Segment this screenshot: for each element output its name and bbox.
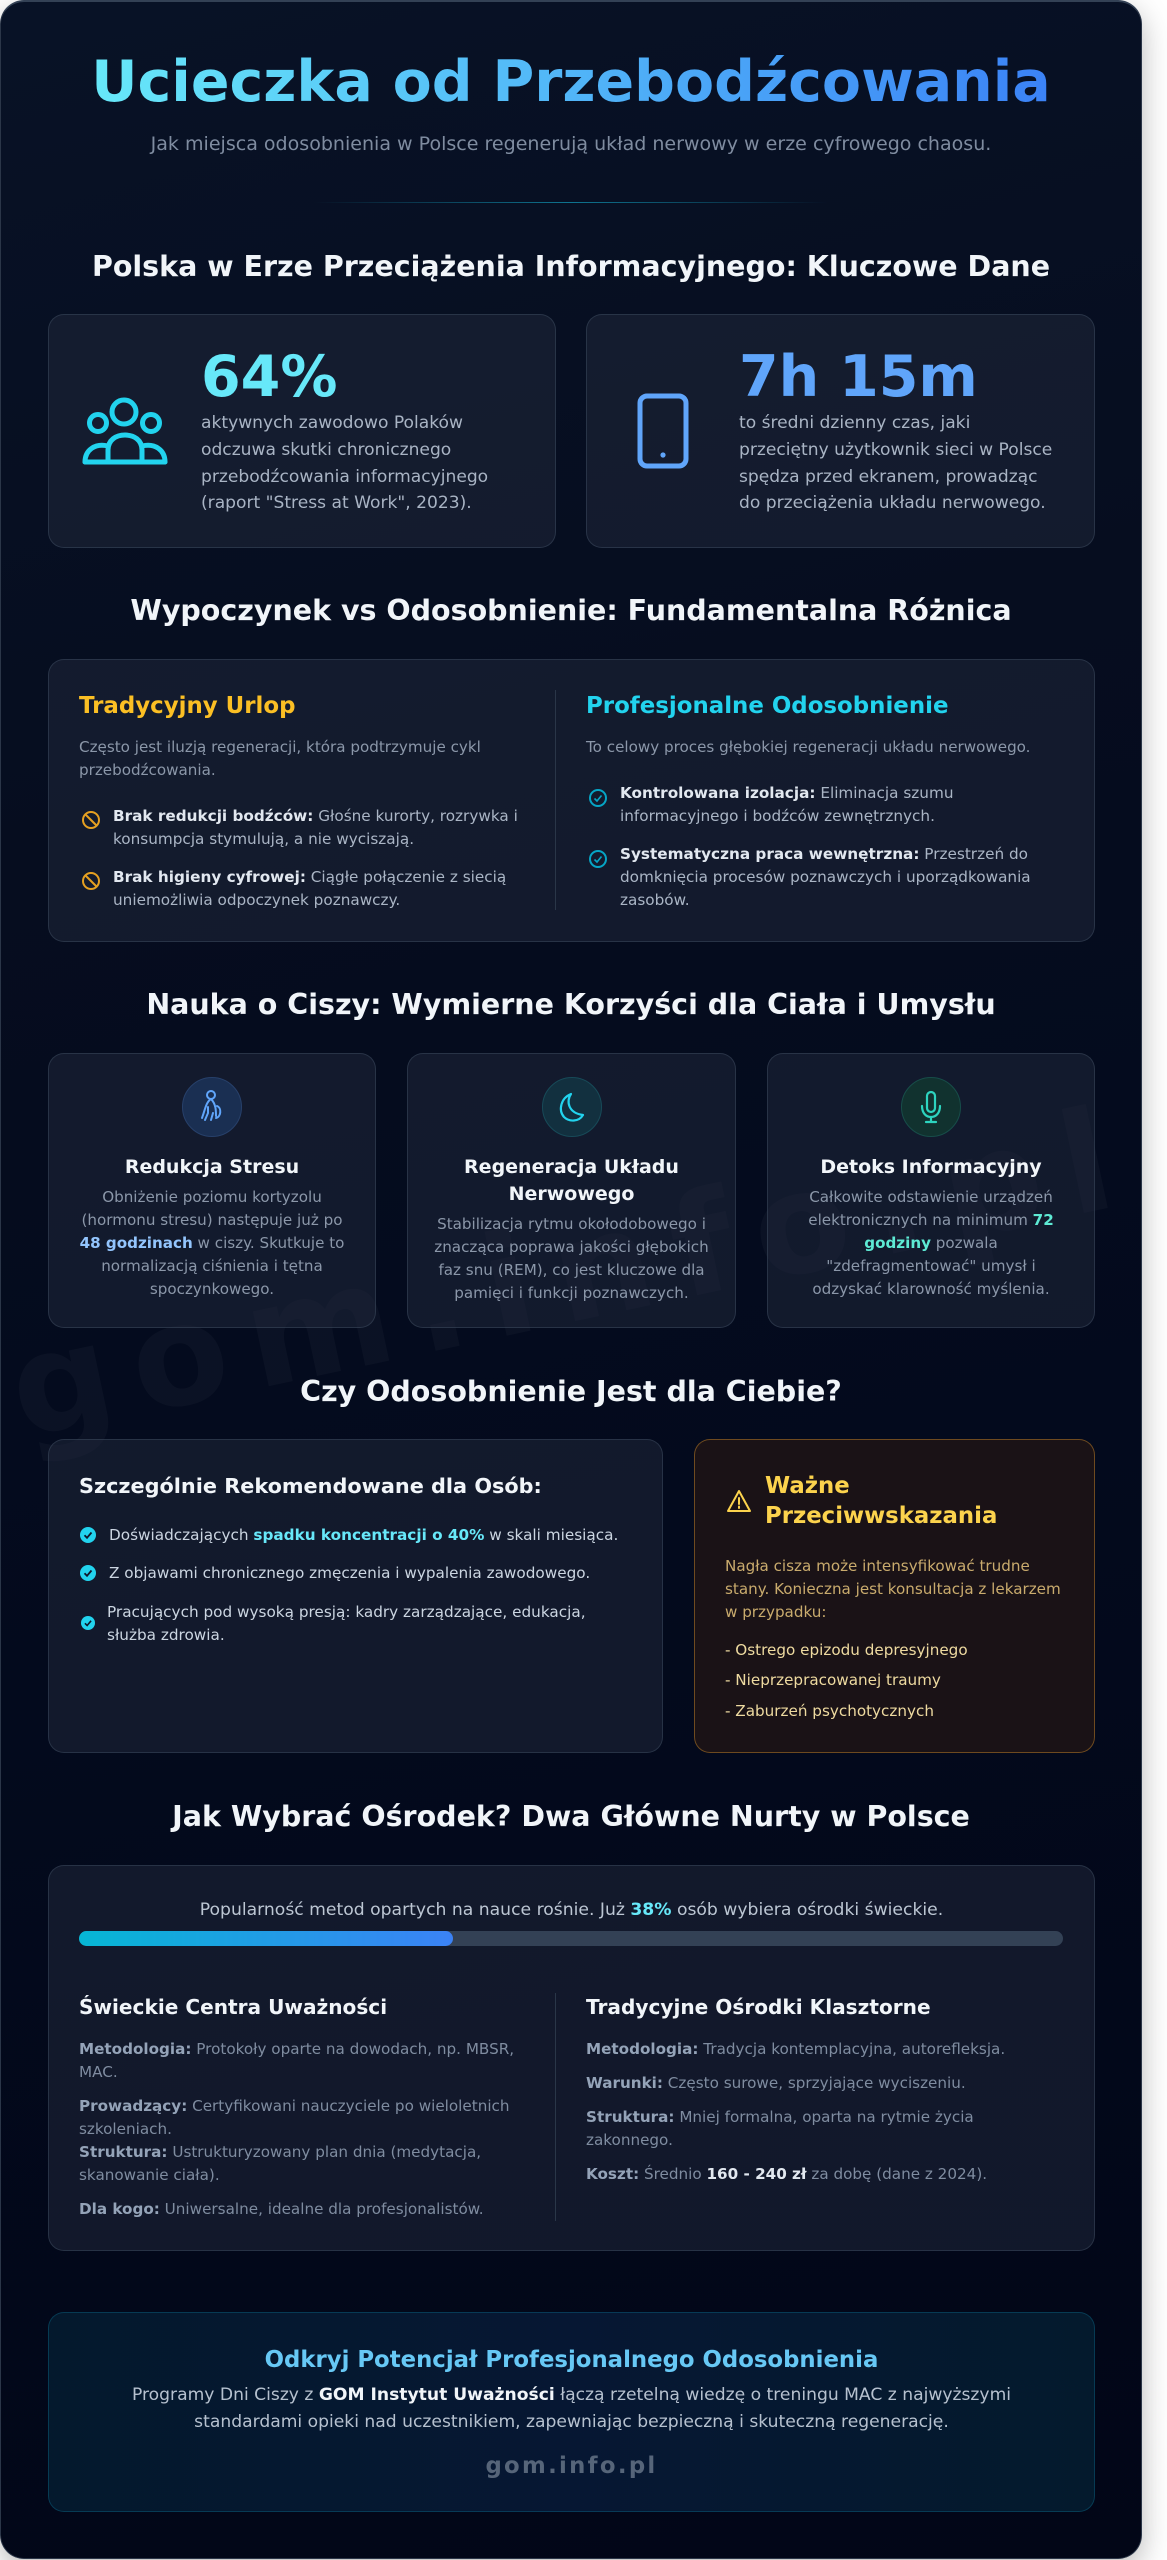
card text: pamięci i funkcji poznawczych. (454, 1284, 689, 1302)
card text: Obniżenie poziomu kortyzolu (102, 1188, 322, 1206)
stat text: aktywnych zawodowo Polaków (201, 413, 463, 433)
stat text: spędza przed ekranem, prowadząc (739, 467, 1038, 487)
text: popularity: Popularność metod opartych na nauce rośnie. Już 38% osób wybiera ośrodki świeckie. (200, 1900, 943, 1920)
heading: choosing a centre: Jak Wybrać Ośrodek? Dwa Główne Nurty w Polsce (172, 1800, 970, 1833)
text: holiday intro: przebodźcowania. (79, 761, 216, 779)
heading: is it for you: Czy Odosobnienie Jest dla Ciebie? (300, 1375, 842, 1408)
column divider (555, 1993, 556, 2221)
panel: recommended for (48, 1439, 663, 1753)
stat text (739, 413, 1052, 513)
panel: two currents (48, 1865, 1095, 2251)
heading: contraindications: Przeciwwskazania (765, 1503, 997, 1529)
panel: nervous system (407, 1053, 736, 1328)
heading: science of silence: Nauka o Ciszy: Wymierne Korzyści dla Ciała i Umysłu (146, 988, 996, 1021)
heading: difference: Wypoczynek vs Odosobnienie: Fundamentalna Różnica (130, 594, 1012, 627)
text: retreat intro: To celowy proces głębokiej regeneracji układu nerwowego. (586, 738, 1030, 756)
list: holiday drawbacks (113, 807, 518, 909)
list: holiday drawbacks: konsumpcja stymulują, a nie wyciszają. (113, 830, 414, 848)
list: retreat benefits: Kontrolowana izolacja: Eliminacja szumu (620, 784, 953, 802)
list: retreat benefits: domknięcia procesów poznawczych i uporządkowania (620, 868, 1031, 886)
progress bar (79, 1931, 1063, 1946)
text: monastic details: Metodologia: Tradycja kontemplacyjna, autorefleksja. Warunki: Często surowe, sprzyjające wyciszeniu. Struktura: Mniej formalna, oparta na rytmie życia (586, 2040, 1005, 2126)
stat value: 64% (201, 344, 337, 410)
column divider (555, 690, 556, 910)
stat text: to średni dzienny czas, jaki (739, 413, 970, 433)
panel: comparison (48, 659, 1095, 942)
card text: 48 godzinach w ciszy. Skutkuje to (80, 1234, 344, 1252)
text: warning: w przypadku: (725, 1603, 826, 1621)
stat text: (raport "Stress at Work", 2023). (201, 493, 472, 513)
heading: secular: Świeckie Centra Uważności (79, 1995, 387, 2019)
icon: ban 2 (82, 872, 100, 890)
icon: check 2 (589, 850, 607, 868)
icon: warning triangle (727, 1490, 751, 1512)
heading: contraindications: Ważne (765, 1473, 850, 1499)
heading: recommended: Szczególnie Rekomendowane dla Osób: (79, 1474, 542, 1498)
list: conditions: - Nieprzepracowanej traumy (725, 1671, 941, 1689)
text: monastic details: zakonnego. Koszt: Średnio 160 - 240 zł za dobę (dane z 2024). (586, 2131, 987, 2183)
icon: microphone (901, 1077, 961, 1137)
list: retreat benefits: Systematyczna praca wewnętrzna: Przestrzeń do (620, 845, 1028, 863)
icon: people (82, 398, 168, 464)
list: conditions: - Zaburzeń psychotycznych (725, 1702, 934, 1720)
heading: professional retreat: Profesjonalne Odosobnienie (586, 693, 948, 719)
icon: ban 1 (82, 811, 100, 829)
panel: stress reduction (48, 1053, 376, 1328)
card title: Nerwowego (509, 1183, 634, 1205)
list item 3 (107, 1603, 586, 1644)
card title: Regeneracja Układu (464, 1156, 679, 1178)
stat value: 7h 15m (739, 344, 978, 410)
card text (434, 1215, 709, 1302)
card text: znacząca poprawa jakości głębokich (434, 1238, 709, 1256)
list: retreat benefits (620, 784, 1031, 909)
text: secular details: skanowanie ciała). Dla kogo: Uniwersalne, idealne dla profesjonalistów. (79, 2166, 484, 2218)
panel: information detox (767, 1053, 1095, 1328)
card text: (hormonu stresu) następuje już po (82, 1211, 342, 1229)
card title (464, 1156, 679, 1205)
card text: Całkowite odstawienie urządzeń (809, 1188, 1053, 1206)
stat text: do przeciążenia układu nerwowego. (739, 493, 1046, 513)
text: secular details: Metodologia: Protokoły oparte na dowodach, np. MBSR, (79, 2040, 514, 2058)
watermark: gom.info.pl (0, 1075, 1148, 1472)
text: warning: Nagła cisza może intensyfikować trudne (725, 1557, 1030, 1575)
list item 3: Pracujących pod wysoką presją: kadry zarządzające, edukacja, (107, 1603, 586, 1621)
list item 3: służba zdrowia. (107, 1626, 225, 1644)
icon: phone (638, 394, 688, 468)
text: secular details (79, 2040, 514, 2218)
text: monastic details (586, 2040, 1005, 2183)
card text: "zdefragmentować" umysł i (826, 1257, 1036, 1275)
icon: check 1 (589, 789, 607, 807)
list: conditions (725, 1641, 968, 1720)
panel: call to action (48, 2312, 1095, 2512)
panel: contraindications (694, 1439, 1095, 1753)
card title: Detoks Informacyjny (820, 1156, 1042, 1178)
title: Ucieczka od Przebodźcowania (91, 49, 1051, 115)
text: warning: stany. Konieczna jest konsultacja z lekarzem (725, 1580, 1061, 1598)
text: secular details: szkoleniach. (79, 2120, 172, 2138)
list: holiday drawbacks: Brak higieny cyfrowej: Ciągłe połączenie z siecią (113, 868, 506, 886)
heading: traditional holiday: Tradycyjny Urlop (79, 693, 296, 719)
heading: contraindications (765, 1473, 997, 1529)
icon: filled check 1 (80, 1527, 96, 1543)
list item 2: Z objawami chronicznego zmęczenia i wypalenia zawodowego. (109, 1564, 590, 1582)
card text: faz snu (REM), co jest kluczowe dla (438, 1261, 705, 1279)
card text: elektronicznych na minimum 72 (808, 1211, 1054, 1229)
cta heading: Odkryj Potencjał Profesjonalnego Odosobnienia (265, 2347, 878, 2373)
list: holiday drawbacks: Brak redukcji bodźców: Głośne kurorty, rozrywka i (113, 807, 518, 825)
stat text (201, 413, 488, 513)
site url: gom.info.pl (485, 2453, 658, 2479)
text: holiday intro: Często jest iluzją regeneracji, która podtrzymuje cykl (79, 738, 481, 756)
card text (808, 1188, 1054, 1298)
stat text: odczuwa skutki chronicznego (201, 440, 451, 460)
stat text: przebodźcowania informacyjnego (201, 467, 488, 487)
list item 1: Doświadczających spadku koncentracji o 40% w skali miesiąca. (109, 1526, 618, 1544)
card text: spoczynkowego. (150, 1280, 274, 1298)
list: holiday drawbacks: uniemożliwia odpoczynek poznawczy. (113, 891, 400, 909)
heading: key data: Polska w Erze Przeciążenia Informacyjnego: Kluczowe Dane (92, 250, 1050, 283)
icon: filled check 2 (80, 1565, 96, 1581)
cta text: standardami opieki nad uczestnikiem, zapewniając bezpieczną i skuteczną regenerację. (194, 2412, 949, 2432)
panel: stat 64% (48, 314, 556, 548)
progress fill 38% (79, 1931, 453, 1946)
card text: Stabilizacja rytmu okołodobowego i (437, 1215, 706, 1233)
card text: odzyskać klarowność myślenia. (812, 1280, 1050, 1298)
list: retreat benefits: informacyjnego i bodźców zewnętrznych. (620, 807, 935, 825)
card text (80, 1188, 344, 1298)
list: conditions: - Ostrego epizodu depresyjnego (725, 1641, 968, 1659)
icon: seated person (182, 1077, 242, 1137)
panel: stat 7h 15m (586, 314, 1095, 548)
stat text: przeciętny użytkownik sieci w Polsce (739, 440, 1052, 460)
divider (314, 202, 828, 203)
subtitle: Jak miejsca odosobnienia w Polsce regenerują układ nerwowy w erze cyfrowego chaosu. (151, 133, 991, 155)
list: retreat benefits: zasobów. (620, 891, 690, 909)
icon: moon (542, 1077, 602, 1137)
cta text: Programy Dni Ciszy z GOM Instytut Uważności łączą rzetelną wiedzę o treningu MAC z najwyższymi (132, 2385, 1011, 2405)
card text: normalizacją ciśnienia i tętna (101, 1257, 323, 1275)
text: holiday intro (79, 738, 481, 779)
card text: godziny pozwala (864, 1234, 998, 1252)
card title: Redukcja Stresu (125, 1156, 299, 1178)
text: secular details: Struktura: Ustrukturyzowany plan dnia (medytacja, (79, 2143, 481, 2161)
text: warning (725, 1557, 1061, 1621)
icon: filled check 3 (81, 1616, 95, 1630)
cta text (132, 2385, 1011, 2432)
heading: monastic: Tradycyjne Ośrodki Klasztorne (586, 1995, 931, 2019)
text: secular details: MAC. Prowadzący: Certyfikowani nauczyciele po wieloletnich (79, 2063, 510, 2115)
